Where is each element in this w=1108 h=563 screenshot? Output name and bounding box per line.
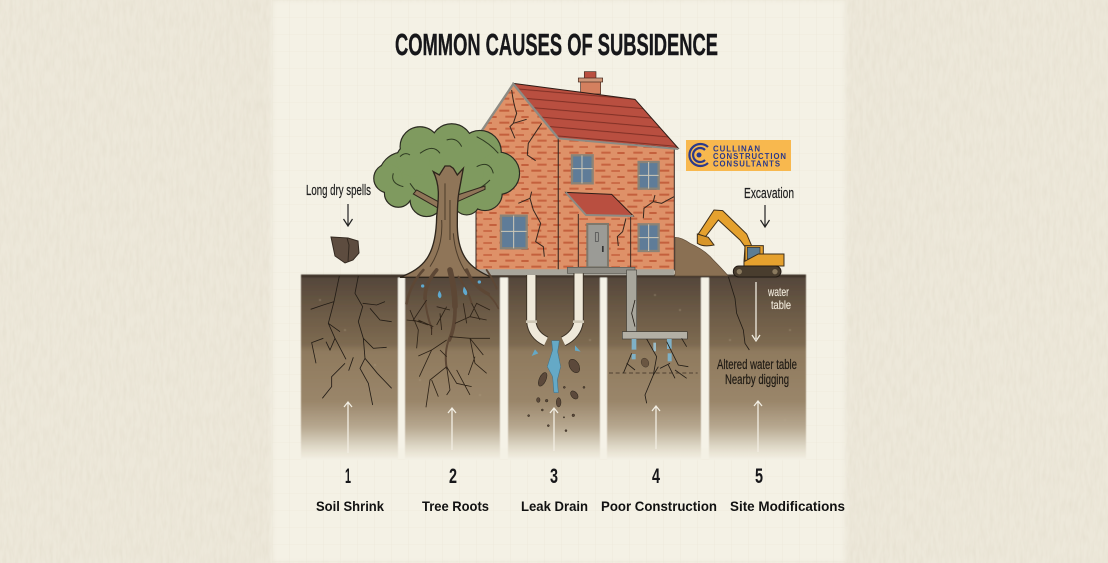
panel 1: soil cracks, panel 2: roots, panel 3: leak <box>311 270 585 432</box>
debris <box>528 357 585 432</box>
cause labels: Tree Roots <box>422 498 489 514</box>
label: excavation <box>744 185 794 227</box>
front wall <box>558 138 674 270</box>
logo: CONSTRUCTION <box>713 152 787 161</box>
foundation <box>476 269 674 275</box>
footing <box>622 270 687 368</box>
cause labels: Soil Shrink <box>316 498 384 514</box>
cause labels: Leak Drain <box>521 498 588 514</box>
cracks <box>510 90 674 257</box>
excavation crack <box>728 277 749 350</box>
chimney <box>578 72 603 94</box>
numbers: 4 <box>652 465 660 488</box>
windows <box>501 155 659 251</box>
tree roots <box>407 270 498 368</box>
soil cracks <box>311 276 392 405</box>
numbers: 1 <box>345 465 351 488</box>
logo: CONSULTANTS <box>713 160 781 168</box>
numbers: 5 <box>755 465 763 488</box>
numbers <box>345 465 763 488</box>
spoil mound <box>675 237 728 276</box>
illustration: tree <box>374 124 519 277</box>
water table label: table <box>771 298 791 312</box>
label: long dry spells: Long dry spells <box>306 182 371 199</box>
numbers: 2 <box>449 465 457 488</box>
numbers: 3 <box>550 465 558 488</box>
label: long dry spells <box>306 182 371 226</box>
altered water table label <box>717 357 797 387</box>
logo: CULLINAN <box>713 144 761 154</box>
excavator <box>697 210 784 277</box>
icon: soil clod <box>331 237 359 263</box>
panel 4: poor construction, panel 5: site modifications <box>609 270 749 403</box>
porch <box>578 214 631 270</box>
dashed level <box>609 372 698 374</box>
side wall <box>476 84 558 270</box>
water leak <box>547 341 561 393</box>
altered water table label: Altered water table <box>717 357 797 372</box>
water drops <box>421 280 481 298</box>
up arrows <box>344 401 762 453</box>
illustration: house <box>476 72 678 275</box>
arrow: water table down <box>752 282 760 341</box>
logo <box>686 140 791 171</box>
cause labels <box>316 498 845 514</box>
cause labels: Poor Construction <box>601 498 717 514</box>
soil columns <box>301 274 806 460</box>
title: COMMON CAUSES OF SUBSIDENCE <box>395 27 718 62</box>
label: excavation: Excavation <box>744 185 794 202</box>
footing cracks <box>623 300 688 403</box>
cause labels: Site Modifications <box>730 498 845 514</box>
water table label <box>767 285 791 312</box>
water table label: water <box>767 285 789 299</box>
illustration: excavator and mound <box>675 210 784 277</box>
roof <box>513 83 678 148</box>
altered water table label: Nearby digging <box>725 372 789 387</box>
door <box>587 224 608 267</box>
leak pipe <box>526 273 584 341</box>
